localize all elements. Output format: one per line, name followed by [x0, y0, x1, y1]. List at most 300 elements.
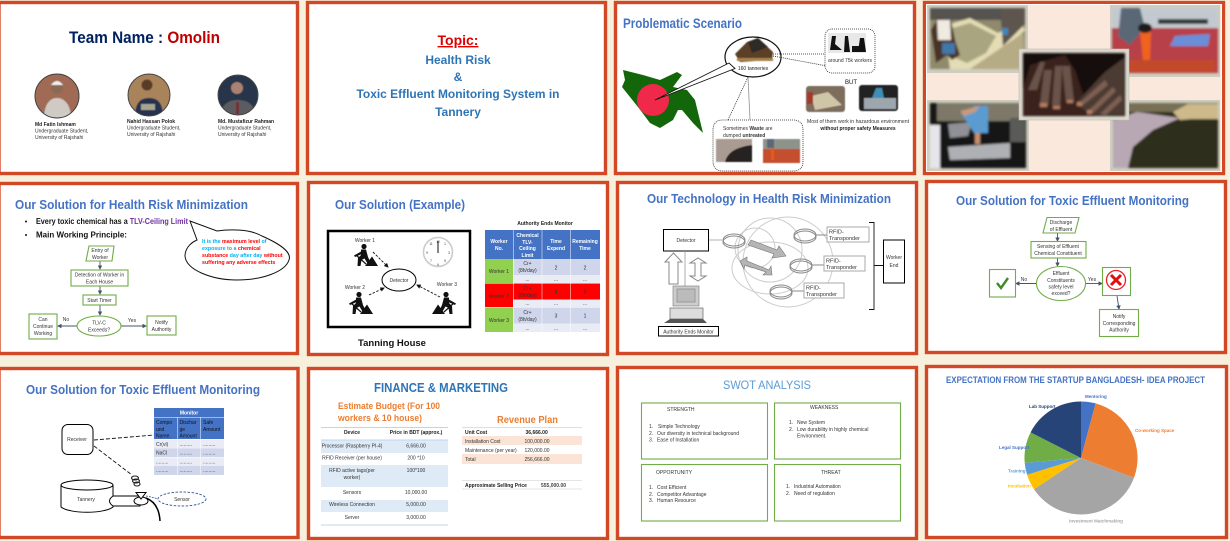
flow step: sensing: Chemical Constituent — [1034, 251, 1082, 257]
table: revenue: Installation Cost — [465, 439, 501, 445]
panel: finance and marketing — [308, 368, 608, 538]
icon: clock: 1 — [444, 242, 446, 246]
transponder 2 — [824, 256, 865, 271]
table: monitor: ......... — [156, 460, 169, 466]
table: budget: Device — [344, 430, 360, 436]
icon: worker 2 — [349, 292, 373, 314]
callout: waste dumping — [713, 120, 803, 171]
table body text: ... — [583, 277, 587, 283]
table: budget: Wireless Connection — [329, 502, 375, 508]
table: monitor: ......... — [180, 460, 192, 466]
title: SWOT: SWOT ANALYSIS — [723, 378, 811, 392]
avatar: Md Fatin Ishmam — [36, 74, 78, 118]
pie labels: Legal Support — [999, 445, 1030, 450]
table: revenue: Approximate Selling Price — [465, 483, 527, 489]
label: authority ends monitor — [658, 326, 718, 336]
flow decision: TLV-C exceeds: Exceeds? — [88, 328, 110, 334]
table: revenue: Total — [465, 457, 476, 463]
transponder 1: RFID- — [829, 230, 844, 236]
SWOT: strength: 2. — [649, 431, 653, 437]
SWOT: strength: STRENGTH — [667, 407, 695, 413]
table header text: Time — [579, 246, 591, 252]
table body text: 0 — [584, 290, 587, 296]
text: topic title: Tannery — [435, 105, 481, 119]
icon: computer — [664, 286, 707, 323]
flow step: discharge: Discharge — [1050, 220, 1072, 226]
callout: TLV definition: substance day after day without — [202, 253, 283, 259]
title: health risk solution: Our Solution for Health Risk Minimization — [15, 197, 248, 212]
SWOT: threat: Need of regulation — [794, 491, 835, 497]
callout: tanneries — [655, 37, 781, 100]
SWOT: threat: Industrial Automation — [794, 484, 841, 490]
title: example: Our Solution (Example) — [335, 197, 465, 212]
panel: effluent flowchart — [926, 182, 1226, 352]
text: hazardous environment: Most of them work in hazardous environment — [807, 119, 910, 125]
icon: cross box — [1102, 268, 1130, 296]
photo: waste pool — [716, 139, 752, 162]
callout: workers — [825, 29, 875, 73]
table: revenue: 120,000.00 — [524, 448, 550, 454]
table: revenue: 36,666.00 — [526, 430, 548, 436]
flow step: sensing — [1031, 242, 1086, 258]
table: budget: Processor (Raspberry PI-4) — [322, 444, 383, 450]
table body text: ... — [583, 326, 587, 332]
SWOT: threat: 2. — [786, 491, 790, 497]
detector box — [664, 230, 708, 251]
table: monitor: Compo — [156, 420, 172, 426]
table: monitor: ......... — [180, 450, 192, 456]
table: budget: Price in BDT (approx.) — [390, 430, 443, 436]
table: revenue: 555,000.00 — [541, 483, 566, 489]
heading: estimate budget — [337, 401, 440, 424]
flow decision: safety level: exceed? — [1052, 291, 1071, 297]
table body text: 2 — [555, 266, 558, 272]
flow step: sensing: Sensing of Effluent — [1037, 244, 1080, 250]
table body text: (8h/day) — [518, 317, 537, 323]
callout: waste dumping: Sometimes Waste are — [723, 126, 773, 132]
table: revenue: 100,000.00 — [524, 439, 550, 445]
title: technology: Our Technology in Health Risk Minimization — [647, 191, 891, 206]
detector: Detector — [390, 278, 409, 284]
title: effluent monitoring system: Our Solution for Toxic Effluent Monitoring — [26, 382, 260, 397]
avatar ring 3 — [218, 75, 258, 115]
table body text: Worker 3 — [489, 318, 509, 324]
text: member 2: Undergraduate Student, — [127, 126, 180, 132]
icon: clock — [424, 238, 452, 267]
SWOT: weakness: 1. — [789, 420, 793, 426]
pie labels: Lab Support — [1029, 404, 1056, 409]
photo: workers in tannery vat — [927, 5, 1028, 73]
table: revenue: Maintenance (per year) — [465, 448, 517, 454]
panel: expectation pie chart — [926, 366, 1226, 538]
worker end box: Worker — [886, 255, 902, 261]
table body text: 1 — [584, 314, 587, 320]
text: topic title — [356, 53, 560, 119]
table body text: ... — [583, 301, 587, 307]
flow decision: safety level — [1036, 266, 1086, 300]
table heading: authority ends monitor: Authority Ends Monitor — [517, 221, 573, 227]
table body text: ... — [525, 301, 530, 307]
table body text: 3 — [555, 314, 558, 320]
dashed arrows to detector — [369, 252, 440, 297]
flow result: notify authority — [147, 316, 176, 335]
table: budget: 3,000.00 — [406, 515, 426, 521]
flow result: notify authority: Notify — [155, 320, 168, 326]
panel: effluent monitoring system — [0, 368, 298, 538]
arrow: two way — [690, 258, 706, 281]
SWOT: strength: Our diversity in technical background — [657, 431, 739, 437]
flow result: notify corresponding authority: Authority — [1109, 328, 1129, 334]
flow labels: no and yes: No — [63, 317, 69, 323]
table: monitor: Cr(vi) — [156, 442, 169, 448]
antenna coils — [723, 229, 827, 299]
table: monitor: Safe — [203, 420, 214, 426]
bracket — [869, 222, 883, 310]
dashed links — [94, 435, 154, 475]
table header text: Worker — [490, 239, 508, 245]
callout: waste dumping: dumped untreated — [723, 133, 765, 139]
transponder 2: RFID- — [826, 258, 841, 264]
flow labels: no and yes — [63, 317, 137, 324]
flow decision: safety level: Effluent — [1053, 271, 1070, 277]
flow step: start timer: Start Timer — [87, 298, 112, 304]
table: monitor: ......... — [180, 442, 192, 448]
flow step: detection — [71, 270, 128, 286]
avatar: Md. Mustafizur Rahman — [218, 75, 258, 115]
pie chart — [1024, 401, 1138, 515]
SWOT: weakness — [774, 403, 900, 459]
icon: clock: 12 — [436, 240, 440, 244]
table body text: ... — [554, 326, 558, 332]
receiver box: Receiver — [67, 437, 87, 443]
table: budget: Server — [345, 515, 360, 521]
SWOT: opportunity: 3. — [649, 498, 653, 504]
panel: technology — [618, 182, 916, 354]
callout: TLV definition: suffering any adverse effects — [202, 260, 275, 266]
transponder 2: Transponder — [826, 265, 857, 271]
title: effluent monitoring: Our Solution for Toxic Effluent Monitoring — [956, 193, 1189, 208]
tannery tank: Tannery — [77, 497, 95, 503]
SWOT: opportunity: OPPORTUNITY — [656, 470, 693, 476]
connector lines — [685, 240, 722, 286]
heading: revenue plan: Revenue Plan — [497, 414, 558, 426]
table header text: Time — [550, 239, 562, 245]
table: monitor: Monitor — [180, 410, 198, 416]
text: member 1: Undergraduate Student, — [35, 128, 88, 134]
table header text: Limit — [522, 253, 534, 259]
detector — [382, 269, 416, 291]
worker labels: Worker 2 — [345, 285, 365, 291]
photo: pouring red effluent — [1110, 5, 1220, 77]
flow labels: no and yes — [1021, 277, 1097, 283]
table: monitor: Amount — [203, 427, 221, 433]
bullet list: Main Working Principle: — [36, 230, 127, 240]
icon: clock: 11 — [429, 242, 433, 246]
table: budget: 200 *10 — [407, 456, 425, 462]
table header text: TLV- — [522, 240, 533, 246]
title: finance: FINANCE & MARKETING — [374, 380, 508, 395]
transponder 1: Transponder — [829, 236, 860, 242]
table: monitor: Amount — [180, 434, 197, 440]
SWOT: opportunity: 1. — [649, 485, 653, 491]
table: revenue — [462, 428, 582, 489]
flow result: can continue working — [29, 314, 57, 339]
text: member 2: Nahid Hassan Polok — [127, 119, 175, 125]
table header text: Expend — [547, 246, 565, 252]
SWOT: weakness: Environment. — [797, 434, 826, 440]
flow step: detection: Each House — [86, 280, 113, 286]
table body text: (8h/day) — [518, 293, 537, 299]
table header text: Remaining — [572, 239, 598, 245]
flow decision: TLV-C exceeds: TLV-C — [92, 320, 106, 326]
flow decision: safety level: safety level — [1048, 284, 1074, 290]
photo: effluent pipe — [1110, 100, 1220, 171]
table: budget: 100*100 — [407, 468, 426, 474]
arrow: signal return — [740, 257, 772, 275]
title: problematic scenario: Problematic Scenario — [623, 15, 742, 31]
SWOT: weakness: Low durability in highly chemical — [797, 427, 868, 433]
panel: team — [0, 2, 298, 174]
photo: hazardous work 1 — [806, 86, 845, 112]
icon: check box — [990, 270, 1016, 297]
table body text: 4 — [555, 290, 558, 296]
table: monitor: ......... — [203, 442, 216, 448]
worker labels — [345, 238, 457, 291]
text: topic title: Toxic Effluent Monitoring System in — [356, 87, 560, 101]
text: member 3: Md. Mustafizur Rahman — [218, 119, 274, 125]
avatar: Nahid Hassan Polok — [128, 74, 170, 116]
flow labels: no and yes: No — [1021, 277, 1027, 283]
table: monitor: Dischar — [180, 420, 197, 426]
icon: clock: 6 — [437, 263, 439, 267]
SWOT: weakness: New System — [797, 420, 825, 426]
transponder 3: RFID- — [806, 286, 821, 292]
flow labels: no and yes: Yes — [1088, 277, 1097, 283]
table header text: Ceiling — [519, 246, 536, 252]
SWOT: threat: THREAT — [821, 470, 841, 476]
sensor: Sensor — [174, 497, 190, 503]
table: monitor: ......... — [203, 460, 216, 466]
table: budget: 10,000.00 — [405, 490, 427, 496]
label: authority ends monitor: Authority Ends Monitor — [663, 329, 714, 335]
avatar ring 1 — [35, 74, 79, 118]
callout: TLV definition: exposure to a chemical — [202, 246, 261, 252]
table: monitor: ......... — [203, 468, 216, 474]
pie labels: Incubation — [1008, 484, 1031, 488]
SWOT: opportunity: Cost Efficient — [657, 485, 687, 491]
photo: red effluent — [763, 139, 800, 163]
SWOT: threat: 1. — [786, 484, 790, 490]
text: member 2: University of Rajshahi — [127, 132, 175, 138]
flow decision: safety level: Constituents — [1047, 278, 1075, 284]
table body text: ... — [554, 301, 558, 307]
SWOT: opportunity: Competitor Advantage — [657, 492, 707, 498]
icon: worker 3 — [432, 292, 456, 314]
table body text: (8h/day) — [518, 268, 537, 274]
table: budget: worker) — [344, 475, 361, 481]
bullet list: Every toxic chemical has a TLV-Ceiling Limit — [36, 217, 188, 226]
callout: tanneries: 160 tanneries — [738, 66, 769, 72]
flow result: can continue working: Can — [38, 317, 48, 323]
pie labels — [999, 394, 1175, 524]
flow result: can continue working: Working — [34, 331, 52, 337]
table: monitor — [154, 408, 224, 475]
text: member 1 — [35, 122, 88, 141]
detector box: Detector — [677, 238, 696, 244]
arrow: up — [665, 253, 682, 284]
table body text: ... — [525, 326, 530, 332]
table: monitor: ......... — [180, 468, 192, 474]
icon: clock: 7 — [430, 259, 432, 263]
table body text: ... — [525, 277, 530, 283]
panel: SWOT — [618, 368, 916, 538]
pie labels: Training — [1008, 468, 1026, 474]
SWOT: strength — [642, 403, 768, 459]
photo: blackened hands — [1019, 49, 1129, 120]
transponder 3: Transponder — [806, 292, 837, 298]
table body text: Worker 2 — [489, 294, 509, 300]
SWOT: weakness: WEAKNESS — [810, 405, 839, 411]
table: revenue: Unit Cost — [465, 430, 488, 436]
flow step: start timer — [83, 295, 116, 305]
table header text — [490, 233, 598, 259]
dotted connectors: workers — [773, 54, 827, 66]
SWOT: opportunity — [642, 464, 768, 521]
flow result: can continue working: Continue — [33, 324, 53, 330]
icon: worker 1 — [354, 244, 378, 266]
SWOT: weakness: 2. — [789, 427, 793, 433]
flow labels: no and yes: Yes — [128, 318, 137, 324]
photo: hazardous work 2 — [859, 85, 898, 111]
icon: clock: 5 — [444, 259, 446, 263]
flow step: detection: Detection of Worker in — [75, 272, 124, 278]
flowchart: effluent — [990, 218, 1138, 336]
table: monitor: NaCl — [156, 450, 167, 456]
table: revenue: 256,666.00 — [524, 457, 550, 463]
pie labels: Mentoring — [1085, 394, 1107, 399]
heading: estimate budget: workers & 10 house) — [337, 413, 422, 424]
table: monitor: ge — [180, 427, 185, 433]
text: member 1: Md Fatin Ishmam — [35, 122, 76, 128]
text: but: BUT — [845, 80, 857, 86]
flow step: entry of worker — [86, 246, 114, 261]
sensor — [146, 492, 206, 506]
flow step: discharge: of Effluent — [1050, 227, 1073, 233]
table: monitor: und — [156, 427, 165, 433]
table: monitor: ......... — [203, 450, 216, 456]
worker end box: End — [890, 263, 899, 269]
table body text: Cr+ — [523, 261, 532, 267]
SWOT: threat — [774, 464, 900, 521]
tannery tank — [61, 480, 140, 512]
dotted connector: waste — [728, 77, 750, 120]
avatar ring 2 — [128, 74, 170, 116]
flow step: entry of worker: Worker — [92, 255, 108, 261]
SWOT: opportunity: Human Resource — [657, 498, 696, 504]
table: budget — [321, 428, 448, 525]
flow result: notify corresponding authority: Corresponding — [1103, 321, 1136, 327]
panel: solution for health risk minimization — [0, 184, 298, 354]
table body text: ... — [554, 277, 558, 283]
table body text: Cr+ — [523, 310, 532, 316]
flow result: notify corresponding authority: Notify — [1113, 314, 1126, 320]
SWOT: opportunity: 2. — [649, 492, 653, 498]
text: member 3: University of Rajshahi — [218, 132, 266, 138]
icon: wireless antenna — [132, 476, 140, 486]
flow step: entry of worker: Entry of — [91, 248, 109, 254]
panel: problematic scenario — [616, 2, 914, 174]
title: team name: Team Name : Omolin — [69, 28, 220, 47]
table: budget: RFID Receiver (per house) — [322, 456, 382, 462]
worker labels: Worker 1 — [355, 238, 375, 244]
arrow: signal forward — [748, 240, 786, 258]
SWOT: strength: Ease of Installation — [657, 438, 699, 444]
table: monitor: ......... — [156, 468, 169, 474]
flow result: notify authority: Authority — [152, 327, 172, 333]
text: hazardous environment — [807, 119, 910, 132]
callout: TLV definition — [185, 221, 289, 280]
pipe outlet and sensor mount — [134, 492, 160, 521]
callout: workers: around 75k workers — [828, 58, 872, 64]
label: tanning house: Tanning House — [358, 338, 426, 349]
table body text: Cr+ — [523, 286, 532, 292]
SWOT: strength: 1. — [649, 424, 653, 430]
table body text: 2 — [584, 266, 587, 272]
table: budget: RFID active tags(per — [329, 468, 375, 474]
worker labels: Worker 3 — [437, 282, 457, 288]
flow result: notify corresponding authority — [1100, 310, 1138, 336]
table: budget: Sensors — [343, 490, 362, 496]
table: authority monitor — [485, 230, 600, 332]
text: topic title: & — [454, 70, 463, 84]
SWOT: strength: 3. — [649, 438, 653, 444]
radio waves — [732, 217, 833, 307]
flowchart: working principle — [29, 246, 176, 339]
icon: clock: 3 — [448, 251, 450, 255]
text: member 3: Undergraduate Student, — [218, 126, 271, 132]
panel: solution example — [308, 182, 608, 354]
pie labels: Co-working Space — [1135, 428, 1175, 433]
panel: photo collage — [924, 2, 1224, 174]
map: Bangladesh — [622, 70, 703, 133]
worker end box — [884, 240, 904, 283]
bullet list — [25, 217, 188, 240]
table body text: Worker 1 — [489, 269, 509, 275]
heading: topic: Topic: — [438, 32, 478, 48]
diagram: tanning house — [328, 231, 470, 327]
icon: clock: 9 — [426, 251, 428, 255]
SWOT: strength: Simple Technology — [658, 424, 700, 430]
table: monitor: Name. — [156, 434, 171, 440]
table header text: No. — [495, 246, 504, 252]
receiver box — [62, 424, 93, 454]
transponder 3 — [804, 283, 844, 298]
flow decision: TLV-C exceeds — [77, 316, 121, 336]
table: budget: 5,000.00 — [406, 502, 426, 508]
callout: TLV definition: It is the maximum level of — [202, 239, 267, 245]
text: member 1: University of Rajshahi — [35, 135, 83, 141]
table body text — [489, 261, 587, 332]
table: budget: 6,666.00 — [406, 444, 426, 450]
heading: estimate budget: Estimate Budget (For 100 — [338, 401, 440, 412]
transponder 1 — [827, 227, 869, 242]
text: topic title: Health Risk — [425, 53, 491, 67]
table header text: Chemical — [516, 233, 539, 239]
flow step: discharge — [1043, 218, 1079, 233]
photo: worker bending over hides — [927, 100, 1029, 171]
panel: topic — [308, 2, 606, 174]
text: member 2 — [127, 119, 180, 138]
